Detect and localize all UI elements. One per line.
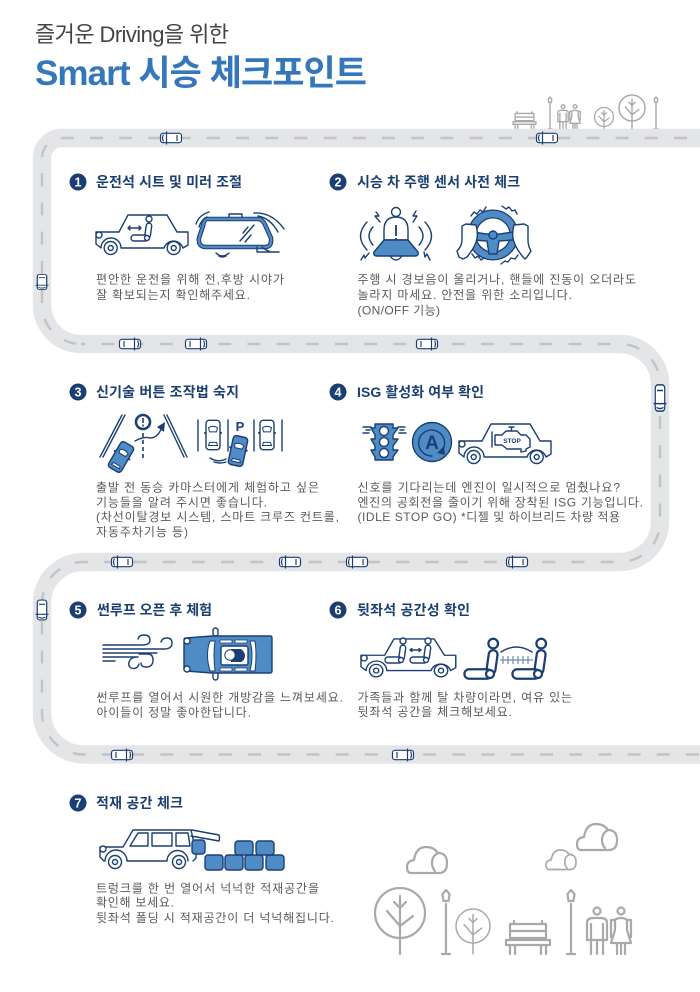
road [42, 138, 700, 754]
icon: auto stop button: A [425, 433, 439, 454]
scenery: upper roadside [513, 95, 658, 133]
icon: car with sunroof [184, 628, 272, 680]
text 7: 확인해 보세요. [96, 896, 174, 910]
text 3 [96, 480, 339, 539]
heading 6: 뒷좌석 공간성 확인 [357, 602, 470, 618]
text 3: 출발 전 동승 카마스터에게 체험하고 싶은 [96, 480, 319, 494]
panel 2: sensor check [330, 174, 636, 318]
text 3: (차선이탈경보 시스템, 스마트 크루즈 컨트롤, [96, 510, 339, 524]
scenery: bottom park [375, 824, 631, 954]
heading 1: 운전석 시트 및 미러 조절 [96, 174, 242, 190]
panel 1: seat and mirror [70, 174, 284, 302]
icon: car with engine stop [459, 424, 551, 464]
icon: SUV with boxes [100, 830, 284, 870]
text 6 [358, 690, 572, 719]
text 4 [358, 480, 643, 524]
text 7: 뒷좌석 폴딩 시 적재공간이 더 넉넉해집니다. [96, 911, 334, 925]
text 1 [96, 272, 284, 302]
text 7 [96, 882, 334, 925]
heading 7: 적재 공간 체크 [96, 795, 183, 811]
panel 4: ISG [330, 384, 643, 524]
panel 6: rear seat space [330, 602, 572, 719]
icon: car with two seats [361, 638, 456, 677]
text 2 [358, 272, 636, 318]
icon: rear view mirror [196, 212, 284, 257]
heading 2: 시승 차 주행 센서 사전 체크 [357, 174, 520, 190]
icon: parking: P [236, 419, 245, 434]
text 5: 썬루프를 열어서 시원한 개방감을 느껴보세요. [96, 690, 343, 704]
text 6: 뒷좌석 공간을 체크해보세요. [358, 705, 512, 719]
heading 6: 6 [335, 604, 342, 618]
text 2: (ON/OFF 기능) [358, 304, 440, 318]
icon: seats legroom [464, 639, 546, 679]
text 5: 아이들이 정말 좋아한답니다. [96, 706, 251, 720]
text 1: 편안한 운전을 위해 전,후방 시야가 [96, 272, 284, 286]
text 3: 기능들을 알려 주시면 좋습니다. [96, 496, 267, 510]
panel 7: cargo [70, 794, 334, 925]
heading 4: ISG 활성화 여부 확인 [357, 384, 484, 400]
heading 3: 신기술 버튼 조작법 숙지 [96, 384, 239, 400]
title [35, 22, 367, 93]
heading 2: 2 [335, 176, 342, 190]
cars on the road [36, 132, 666, 762]
heading 1: 1 [75, 176, 82, 190]
text 3: 자동주차기능 등) [96, 525, 188, 539]
icon: parking [198, 419, 282, 467]
text 7: 트렁크를 한 번 열어서 넉넉한 적재공간을 [96, 882, 319, 896]
icon: auto stop button [412, 422, 452, 462]
heading 5: 썬루프 오픈 후 체험 [97, 602, 212, 618]
icon: traffic light [363, 424, 406, 460]
panel 3: advanced tech buttons [70, 384, 339, 539]
text 1: 잘 확보되는지 확인해주세요. [96, 288, 250, 302]
heading 7: 7 [75, 796, 82, 810]
icon: wind [103, 635, 172, 668]
icon: car with engine stop: STOP [503, 438, 521, 445]
icon: steering wheel with hands [457, 206, 531, 264]
icon: car with seat [96, 215, 188, 254]
text 6: 가족들과 함께 탈 차량이라면, 여유 있는 [358, 690, 572, 704]
icon: lane departure [100, 415, 187, 474]
heading 3: 3 [75, 386, 82, 400]
heading 5: 5 [75, 604, 82, 618]
text 5 [96, 690, 343, 720]
panel 5: sunroof [70, 602, 343, 720]
text 4: 엔진의 공회전을 줄이기 위해 장착된 ISG 기능입니다. [358, 496, 643, 510]
title: Smart 시승 체크포인트 [35, 54, 367, 93]
text 2: 주행 시 경보음이 울리거나, 핸들에 진동이 오더라도 [358, 272, 636, 286]
text 4: 신호를 기다리는데 엔진이 일시적으로 멈췄나요? [358, 480, 620, 494]
text 2: 놀라지 마세요. 안전을 위한 소리입니다. [358, 288, 572, 302]
title: 즐거운 Driving을 위한 [35, 22, 229, 47]
text 4: (IDLE STOP GO) *디젤 및 하이브리드 차량 적용 [358, 510, 620, 524]
icon: alarm bell [360, 208, 432, 260]
heading 4: 4 [335, 386, 342, 400]
